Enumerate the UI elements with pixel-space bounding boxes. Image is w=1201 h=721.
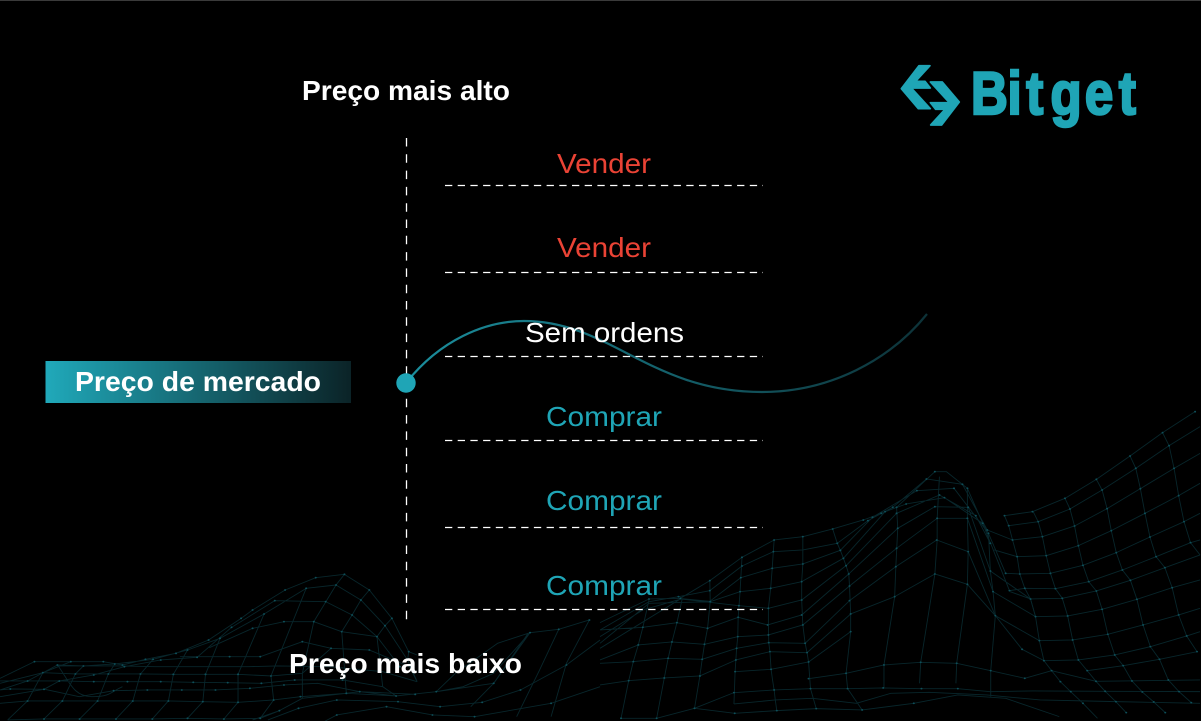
logo wordmark: Bitget: [971, 60, 1136, 127]
mesh: right wave: [600, 412, 1200, 718]
grid level: sell 1: Vender: [557, 148, 651, 179]
market price label: Preço de mercado: [75, 366, 321, 397]
grid level: buy 2: Comprar: [546, 485, 662, 516]
market price label: [46, 361, 351, 403]
top edge line: [0, 0, 1201, 1]
heading: lowest price: Preço mais baixo: [289, 648, 522, 679]
grid level: buy 1: Comprar: [546, 401, 662, 432]
grid level: no orders: Sem ordens: [525, 317, 684, 348]
icon: Bitget arrows: [901, 66, 959, 125]
heading: highest price: Preço mais alto: [302, 75, 510, 106]
grid level: sell 2: Vender: [557, 232, 651, 263]
mesh: left wave: [0, 574, 600, 721]
logo: Bitget: [901, 60, 1136, 127]
vertical price axis: [406, 138, 408, 622]
price curve: [406, 314, 927, 392]
market price marker: [396, 373, 416, 393]
grid level: buy 3: Comprar: [546, 570, 662, 601]
